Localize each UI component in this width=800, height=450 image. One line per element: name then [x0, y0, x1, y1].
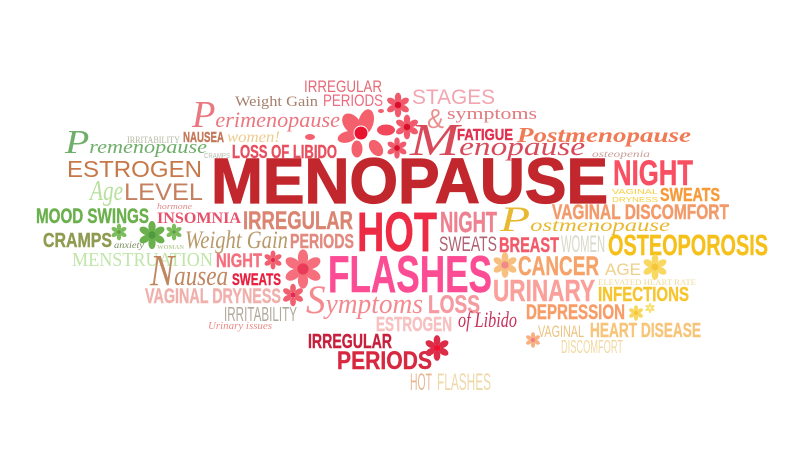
icon: large red flower: [336, 108, 395, 159]
word: INSOMNIA: INSOMNIA: [157, 210, 241, 227]
word: Postmenopause gold: P ostmenopause: [499, 199, 670, 239]
icon: pink flower small: [282, 284, 304, 306]
word: Age: Age: [88, 176, 123, 207]
word: Perimenopause: Perimenopause: [191, 94, 340, 136]
word: FLASHES: FLASHES: [328, 246, 492, 304]
word cloud infographic: FLASHES: [437, 369, 491, 396]
word: INFECTIONS: INFECTIONS: [598, 284, 689, 306]
word: DEPRESSION: DEPRESSION: [526, 301, 625, 324]
word: ELEVATED HEART RATE: ELEVATED HEART RATE: [598, 277, 696, 287]
icon: pink flower large: [283, 249, 323, 289]
word: anxiety: anxiety: [114, 240, 144, 250]
word: NIGHT center: NIGHT: [440, 207, 497, 239]
word: VAGINAL DRYNESS: VAGINAL DRYNESS: [145, 285, 281, 308]
word: SWEATS right: SWEATS: [660, 185, 720, 205]
word: FATIGUE: FATIGUE: [457, 127, 513, 144]
word: DRYNESS small: DRYNESS: [612, 195, 658, 204]
word: NIGHT right: NIGHT: [613, 154, 693, 193]
word: WOMAN: WOMAN: [157, 244, 184, 251]
word: IRRITABILITY thin: IRRITABILITY: [224, 304, 297, 326]
word: CANCER: CANCER: [518, 251, 599, 281]
word: symptoms: symptoms: [447, 104, 537, 123]
word: DISCOMFORT: DISCOMFORT: [561, 337, 623, 357]
word: CRAMPS green: CRAMPS: [43, 230, 112, 252]
word: VAGINAL thin: VAGINAL: [538, 322, 584, 341]
word: HEART DISEASE: HEART DISEASE: [590, 320, 701, 342]
word: BREAST: BREAST: [499, 234, 559, 257]
icon: small red flower middle: [395, 115, 419, 139]
word: osteopenia: osteopenia: [592, 149, 651, 159]
icon: pink flower left: [264, 250, 282, 270]
icon: yellow flower small: [628, 305, 644, 321]
word: IRREGULAR tan: IRREGULAR: [243, 207, 353, 235]
word: women: women!: [227, 129, 280, 146]
word: STAGES: STAGES: [412, 86, 495, 109]
word: LOSS OF LIBIDO: LOSS OF LIBIDO: [232, 141, 337, 162]
word: ESTROGEN: ESTROGEN: [67, 156, 202, 182]
icon: green flower left: [111, 224, 127, 240]
word: VAGINAL DISCOMFORT: VAGINAL DISCOMFORT: [552, 201, 729, 224]
word: Symptoms script: Symptoms: [306, 277, 423, 322]
word: Menopause script: M enopause: [409, 114, 585, 165]
word: VAGINAL small: VAGINAL: [612, 187, 658, 196]
word: ESTROGEN pale: ESTROGEN: [376, 314, 452, 336]
icon: green flower large: [138, 221, 166, 249]
word cloud infographic: WOMEN: [561, 231, 605, 258]
icon: yellow flower: [642, 254, 668, 280]
word: Premenopause: Premenopause: [64, 124, 207, 161]
word: LEVEL: LEVEL: [124, 179, 203, 206]
word: MENSTRUATION: MENSTRUATION: [72, 249, 213, 271]
word: SWEATS left: SWEATS: [232, 270, 281, 289]
word: IRREGULAR top: IRREGULAR: [304, 77, 382, 96]
word: of Libido: of Libido: [458, 307, 517, 332]
word: PERIODS bottom: PERIODS: [337, 347, 432, 375]
word: ampersand: &: [427, 103, 444, 134]
icon: crimson flower: [424, 335, 450, 361]
icon: small red flower top: [386, 93, 410, 117]
icon: peach flower: [492, 252, 518, 278]
word: hormone: hormone: [157, 202, 193, 211]
word cloud infographic: HOT: [410, 369, 432, 396]
word: MOOD SWINGS: MOOD SWINGS: [36, 205, 149, 228]
word: PERIODS tan: PERIODS: [290, 231, 354, 253]
word: NIGHT left: NIGHT: [216, 251, 262, 272]
word: IRRITABILITY serif: IRRITABILITY: [127, 135, 180, 145]
word: NAUSEA: NAUSEA: [183, 130, 224, 146]
word: Postmenopause orange: Postmenopause: [516, 123, 691, 147]
word: Weight Gain serif: Weight Gain: [235, 94, 319, 110]
word: HOT: HOT: [357, 200, 437, 263]
word: PERIODS top: PERIODS: [323, 91, 383, 110]
word: SWEATS center: SWEATS: [439, 233, 497, 256]
icon: peach flower small: [525, 332, 541, 348]
title: MENOPAUSE: MENOPAUSE: [211, 145, 608, 217]
icon: green flower right: [166, 224, 182, 240]
word: URINARY: URINARY: [493, 273, 595, 308]
icon: yellow sparkle: [645, 303, 655, 313]
word: IRREGULAR bottom: IRREGULAR: [308, 331, 392, 353]
word: Nausea script: Nausea: [149, 246, 228, 295]
word: AGE: AGE: [605, 260, 641, 279]
icon: small red flower bottom: [386, 137, 408, 159]
word: Weight Gain script: Weight Gain: [185, 227, 288, 254]
word: LOSS: LOSS: [428, 291, 480, 319]
word: CRAMPS small: CRAMPS: [204, 153, 230, 160]
icon: loose petals: [305, 109, 384, 140]
word: Urinary issues: Urinary issues: [208, 320, 272, 332]
